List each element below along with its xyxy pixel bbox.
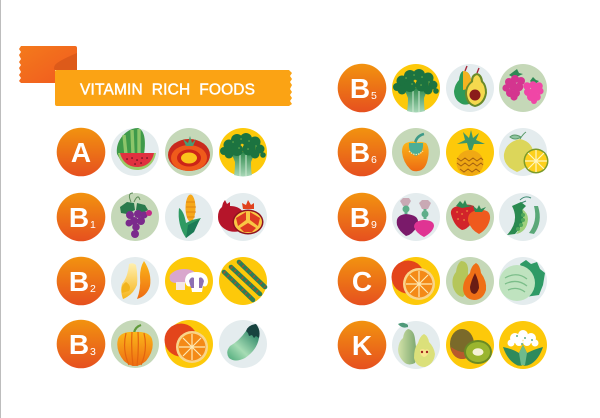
icon: pomegranate bbox=[218, 193, 267, 241]
badge: vitamin B6: 6 bbox=[371, 154, 377, 166]
icon: pumpkin bbox=[111, 320, 159, 368]
badge: vitamin C: C bbox=[352, 266, 372, 297]
badge: vitamin B5: 5 bbox=[371, 90, 377, 102]
badge: vitamin B6 bbox=[338, 128, 386, 176]
ribbon shadow fold bbox=[54, 53, 77, 70]
icon: grapes bbox=[111, 193, 159, 241]
title ribbon bbox=[19, 46, 292, 106]
icon: cabbage bbox=[499, 257, 547, 305]
ribbon front bbox=[55, 70, 292, 106]
icon: cauliflower bbox=[499, 321, 547, 369]
icon: asparagus bbox=[219, 257, 267, 305]
badge: vitamin B3: 3 bbox=[90, 346, 96, 358]
icon: peas bbox=[499, 193, 547, 241]
icon: bananas bbox=[111, 257, 159, 305]
badge: vitamin B1 bbox=[57, 193, 105, 241]
ribbon back fold bbox=[19, 46, 77, 83]
badge: vitamin C bbox=[338, 257, 386, 305]
badge: vitamin B9: 9 bbox=[371, 219, 377, 231]
badge: vitamin B1: B bbox=[69, 202, 89, 233]
icon: kiwi bbox=[446, 321, 494, 369]
icon: papaya bbox=[446, 257, 494, 305]
icon: avocado bbox=[446, 64, 494, 112]
icon: tomato bbox=[165, 128, 213, 176]
icon: mushrooms bbox=[165, 257, 213, 305]
badge: vitamin B2: B bbox=[69, 266, 89, 297]
icon: lemon bbox=[499, 128, 548, 176]
icon: broccoli bbox=[392, 64, 440, 112]
badge: vitamin B2 bbox=[57, 257, 105, 305]
icon: beets bbox=[392, 193, 440, 241]
badge: vitamin B9: B bbox=[350, 202, 370, 233]
icon: pears bbox=[392, 321, 440, 369]
badge: vitamin A: A bbox=[71, 137, 91, 168]
icon: watermelon bbox=[111, 128, 159, 176]
icon: orange bbox=[164, 320, 213, 368]
title text: VITAMIN RICH FOODS bbox=[80, 82, 255, 98]
badge: vitamin B6: B bbox=[350, 137, 370, 168]
icon: orange bbox=[392, 257, 440, 305]
icon: corn bbox=[165, 193, 213, 241]
badge: vitamin K bbox=[338, 321, 386, 369]
badge: vitamin B5 bbox=[338, 64, 386, 112]
icon: eggplant bbox=[219, 320, 267, 368]
badge: vitamin K: K bbox=[352, 330, 372, 361]
badge: vitamin B1: 1 bbox=[90, 219, 96, 231]
badge: vitamin B3 bbox=[57, 320, 105, 368]
icon: pineapple bbox=[446, 128, 494, 176]
badge: vitamin A bbox=[57, 128, 105, 176]
page left edge line bbox=[0, 0, 1, 418]
icon: raspberries bbox=[499, 64, 547, 112]
badge: vitamin B5: B bbox=[350, 73, 370, 104]
badge: vitamin B3: B bbox=[69, 329, 89, 360]
badge: vitamin B2: 2 bbox=[90, 283, 96, 295]
icon: broccoli bbox=[219, 128, 267, 176]
icon: strawberries bbox=[446, 193, 494, 241]
badge: vitamin B9 bbox=[338, 193, 386, 241]
icon: bell pepper bbox=[392, 128, 440, 176]
